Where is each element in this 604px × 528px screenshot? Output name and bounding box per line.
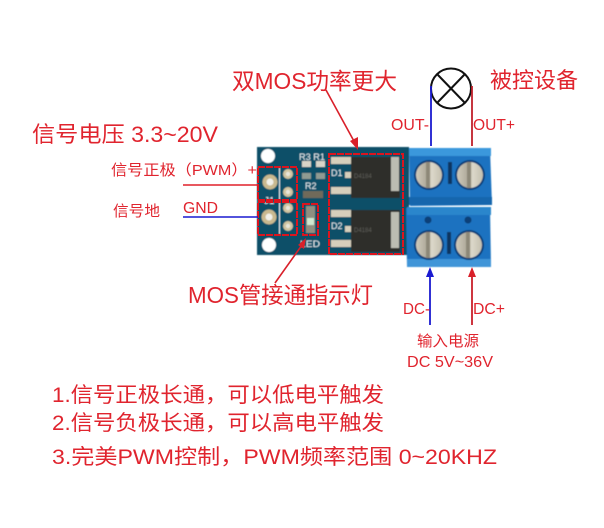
MOSFET D1: D4184 bbox=[354, 174, 372, 180]
wire: OUT- bbox=[430, 86, 432, 146]
icon: controlled lamp bbox=[431, 68, 471, 108]
MOSFET D2: D4184 bbox=[354, 228, 372, 234]
label: GND: GND bbox=[183, 200, 218, 217]
title: dual MOS: 双MOS功率更大 bbox=[232, 68, 397, 94]
arrow: DC+ bbox=[468, 267, 476, 325]
PCB board: J1 bbox=[264, 196, 275, 207]
PCB board: D2 bbox=[331, 221, 343, 231]
label: signal ground: 信号地 bbox=[113, 203, 160, 220]
MOSFET D1 bbox=[331, 157, 400, 198]
label: controlled device: 被控设备 bbox=[490, 68, 578, 93]
note 1: 1.信号正极长通，可以低电平触发 bbox=[52, 384, 384, 407]
label: DC-: DC- bbox=[403, 301, 430, 318]
label: input voltage: DC 5V~36V bbox=[407, 354, 493, 371]
arrow: dual MOS to MOSFETs bbox=[326, 90, 358, 150]
arrow: indicator to LED bbox=[275, 238, 306, 283]
wire: PWM bbox=[183, 184, 258, 186]
PCB board: R2 bbox=[305, 181, 317, 191]
label: OUT+: OUT+ bbox=[473, 117, 515, 134]
note 2: 2.信号负极长通，可以高电平触发 bbox=[52, 412, 384, 435]
label: signal voltage: 信号电压 3.3~20V bbox=[32, 122, 218, 147]
arrow: DC- bbox=[426, 267, 434, 325]
PCB board: D1 bbox=[331, 168, 343, 178]
terminal block: output bbox=[409, 148, 492, 206]
PCB board: LED bbox=[300, 239, 321, 249]
note 3: 3.完美PWM控制，PWM频率范围 0~20KHZ bbox=[52, 446, 497, 469]
label: input power: 输入电源 bbox=[417, 333, 479, 350]
MOSFET D2 bbox=[331, 210, 400, 252]
label: MOS on indicator: MOS管接通指示灯 bbox=[188, 282, 373, 308]
label: signal positive: 信号正极（PWM）+ bbox=[111, 162, 257, 179]
label: OUT-: OUT- bbox=[391, 117, 429, 134]
terminal block: input bbox=[406, 207, 491, 267]
PCB board: R3 R1 bbox=[299, 152, 325, 162]
module photo: PCB with MOSFETs and terminals bbox=[257, 147, 492, 267]
PCB board bbox=[257, 147, 409, 255]
wire: GND bbox=[183, 216, 258, 218]
red highlight boxes bbox=[258, 154, 403, 254]
label: DC+: DC+ bbox=[473, 301, 505, 318]
wire: OUT+ bbox=[471, 86, 473, 146]
